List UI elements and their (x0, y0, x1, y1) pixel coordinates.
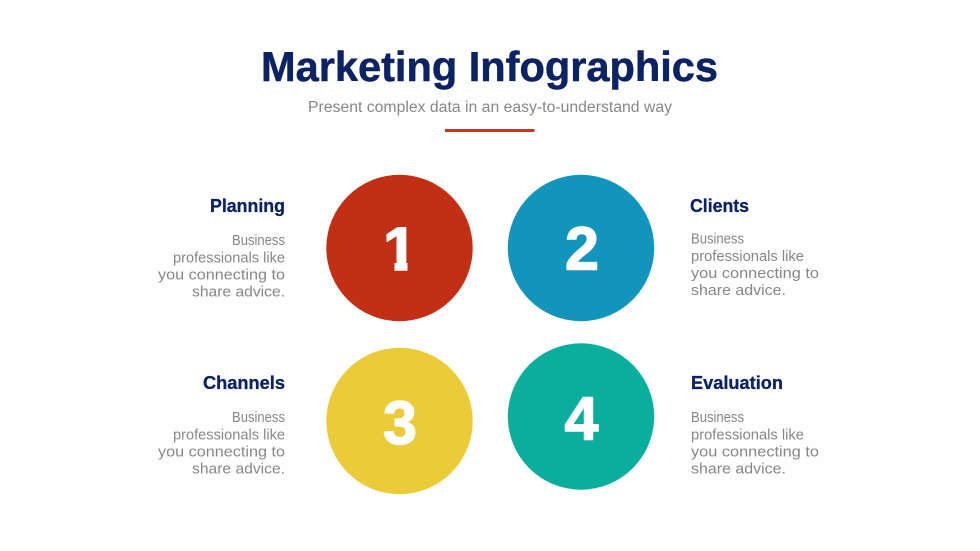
panel: clients text (690, 196, 819, 299)
text block: Clients description: professionals like (691, 249, 804, 265)
text block: Planning description (158, 233, 285, 300)
heading: Planning: Planning (210, 196, 285, 216)
panel: circle 4 (508, 343, 654, 490)
panel: planning text (158, 196, 285, 300)
text block: Channels description (158, 410, 285, 478)
subtitle: Present complex data in an easy-to-understand way (308, 99, 672, 116)
heading: Clients: Clients (690, 196, 749, 216)
text block: Clients description: Business (691, 232, 744, 248)
heading: Evaluation: Evaluation (691, 373, 783, 393)
text block: Evaluation description: share advice. (691, 462, 786, 478)
panel: circle 2: 2 (565, 214, 599, 282)
text block: Planning description: professionals like (173, 250, 285, 266)
text block: Clients description (691, 232, 819, 299)
text block: Evaluation description: professionals like (691, 428, 804, 444)
panel: circle 4: 4 (565, 384, 599, 452)
text block: Clients description: share advice. (691, 283, 786, 299)
text block: Planning description: you connecting to (158, 268, 285, 284)
title underline (445, 129, 534, 132)
panel: circle 1 (326, 175, 473, 321)
text block: Evaluation description: you connecting to (691, 444, 819, 460)
text block: Clients description: you connecting to (691, 266, 819, 282)
panel: evaluation text (691, 373, 819, 478)
panel: circle 3: 3 (383, 389, 417, 457)
title: Marketing Infographics (261, 43, 718, 90)
text block: Channels description: you connecting to (158, 444, 285, 460)
panel: channels text (158, 373, 285, 478)
panel: circle 1: 1 (383, 215, 417, 283)
text block: Planning description: Business (232, 233, 285, 249)
text block: Planning description: share advice. (192, 284, 285, 300)
text block: Channels description: share advice. (192, 462, 285, 478)
text block: Channels description: professionals like (173, 428, 285, 444)
heading: Channels: Channels (203, 373, 285, 393)
text block: Evaluation description: Business (691, 410, 744, 426)
text block: Channels description: Business (232, 410, 285, 426)
panel: circle 2 (508, 175, 654, 321)
panel: circle 3 (326, 348, 473, 494)
text block: Evaluation description (691, 410, 819, 478)
